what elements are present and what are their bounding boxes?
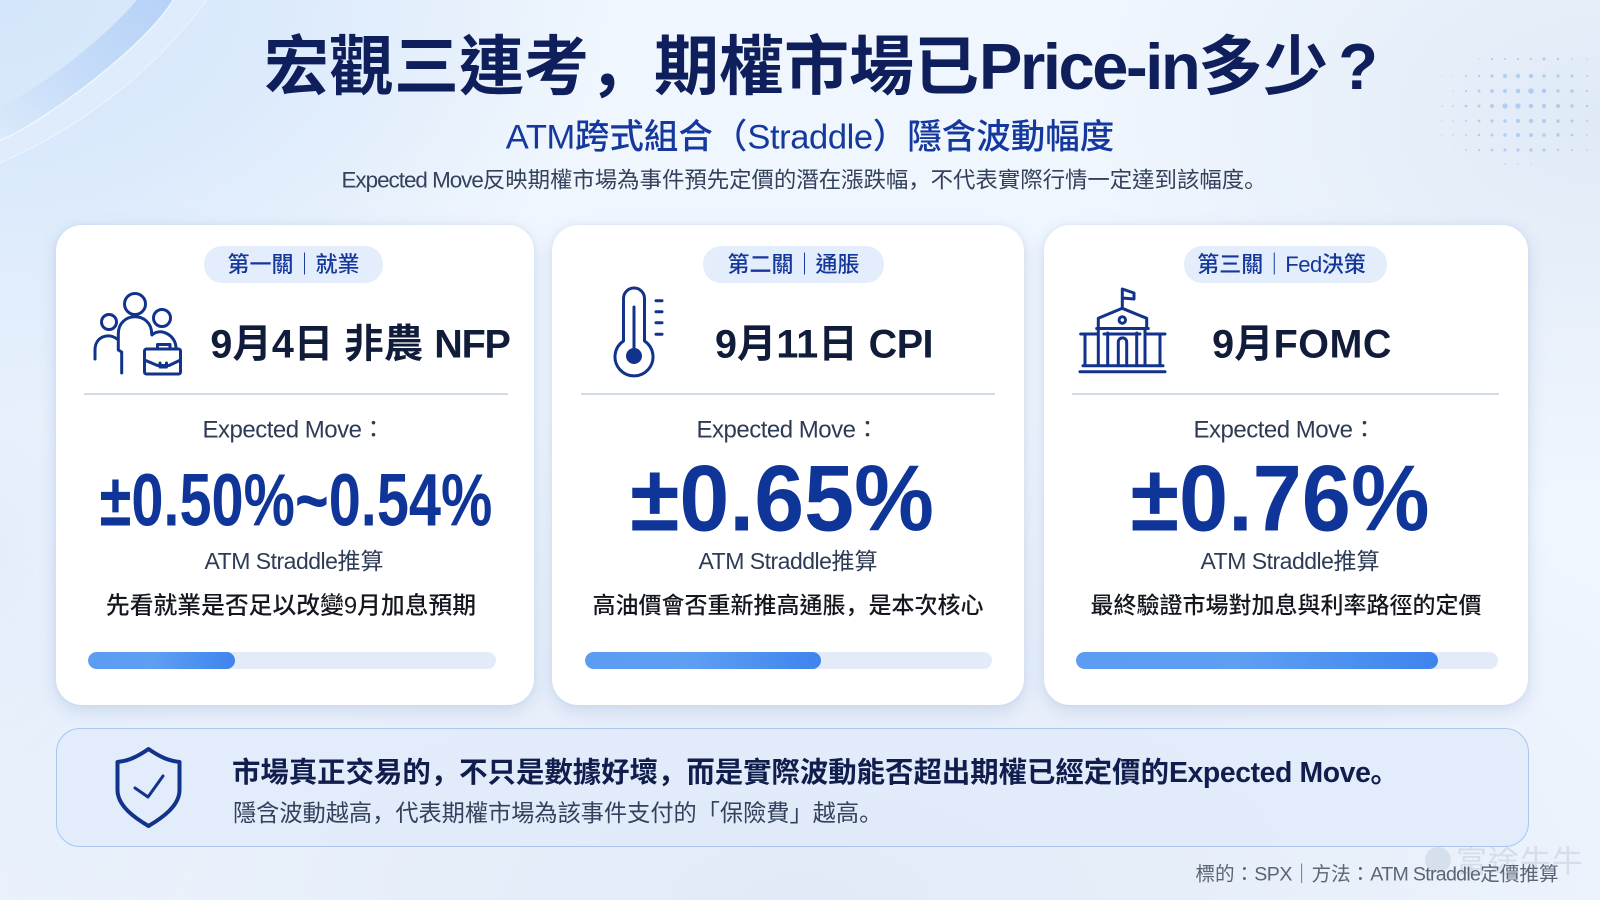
progress bar <box>88 652 496 669</box>
tag: stage 3 <box>1184 246 1387 283</box>
icon: people with briefcase <box>94 292 182 376</box>
value: ±0.76% <box>1130 446 1430 551</box>
icon: shield check <box>116 747 182 828</box>
footer source: 標的：SPX｜方法：ATM Straddle定價推算 <box>1195 863 1559 885</box>
heading: 9月4日 非農 NFP <box>210 322 510 366</box>
label: expected move: Expected Move： <box>697 417 879 444</box>
panel: card 3 FOMC <box>1044 225 1528 705</box>
method: ATM Straddle推算 <box>699 548 877 574</box>
subtitle: ATM跨式組合（Straddle）隱含波動幅度 <box>506 118 1114 156</box>
panel: card 1 NFP <box>56 225 534 705</box>
heading: 9月FOMC <box>1212 322 1392 366</box>
value: ±0.50%~0.54% <box>100 459 492 542</box>
title: 宏觀三連考，期權市場已Price-in多少? <box>264 30 1380 103</box>
note: 高油價會否重新推高通脹，是本次核心 <box>592 592 984 618</box>
tag: stage 2: 第二關｜通脹 <box>727 252 860 277</box>
value: ±0.65% <box>630 446 934 551</box>
icon: thermometer <box>614 286 664 378</box>
progress bar <box>585 652 992 669</box>
method: ATM Straddle推算 <box>1201 548 1379 574</box>
tag: stage 2 <box>703 246 884 283</box>
note: 先看就業是否足以改變9月加息預期 <box>106 593 476 620</box>
note: 最終驗證市場對加息與利率路徑的定價 <box>1090 592 1482 618</box>
label: expected move: Expected Move： <box>1194 417 1376 444</box>
tag: stage 1: 第一關｜就業 <box>227 252 360 277</box>
progress bar <box>1076 652 1498 669</box>
heading: 9月11日 CPI <box>715 322 933 366</box>
watermark: 富途牛牛 <box>1456 844 1584 879</box>
tag: stage 3: 第三關｜Fed決策 <box>1197 252 1366 277</box>
method: ATM Straddle推算 <box>205 548 383 574</box>
callout heading: 市場真正交易的，不只是數據好壞，而是實際波動能否超出期權已經定價的Expected Move。 <box>232 757 1399 789</box>
label: expected move: Expected Move： <box>203 417 385 444</box>
callout note: 隱含波動越高，代表期權市場為該事件支付的「保險費」越高。 <box>233 800 882 826</box>
tag: stage 1 <box>204 246 383 283</box>
callout <box>56 728 1529 847</box>
icon: government building <box>1078 288 1166 374</box>
description: Expected Move反映期權市場為事件預先定價的潛在漲跌幅，不代表實際行情一定達到該幅度。 <box>341 168 1267 193</box>
panel: card 2 CPI <box>552 225 1024 705</box>
